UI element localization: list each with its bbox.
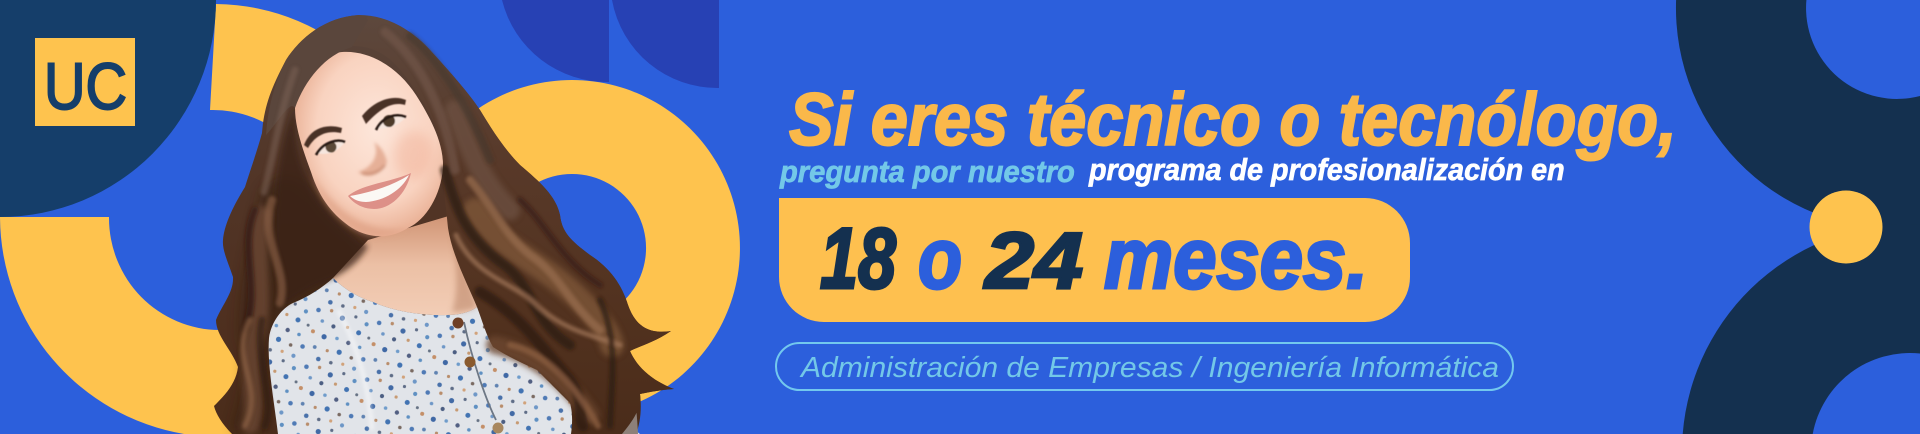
subheading (779, 153, 1565, 189)
logo UC: UC (44, 49, 127, 123)
subheading: programa de profesionalización en (1088, 153, 1565, 187)
hair left inner dark (275, 105, 368, 305)
nose (358, 142, 387, 176)
headline: Si eres técnico o tecnólogo, (789, 78, 1677, 161)
neck shadow (452, 225, 477, 312)
brows (304, 98, 406, 148)
hair back (214, 15, 674, 434)
hair shading left (232, 176, 363, 430)
mouth (348, 173, 411, 209)
duration pill: 18 (820, 212, 897, 307)
right lower blue circle (1813, 353, 1920, 434)
soft hair light bands (250, 110, 612, 425)
woman photo illustration (214, 15, 674, 434)
duration pill (779, 198, 1410, 322)
right upper blue circle (1806, 0, 1920, 99)
eyes (316, 115, 406, 155)
duration pill: meses. (1104, 211, 1368, 307)
yellow rings (0, 4, 740, 434)
programs pill (776, 343, 1513, 390)
face (295, 52, 443, 236)
cheek blush (394, 131, 434, 179)
buttons (452, 318, 464, 328)
dark circle top left (0, 0, 216, 217)
hair highlights (243, 32, 620, 426)
hair front right (352, 16, 674, 434)
jaw shadow (311, 172, 408, 236)
blouse (269, 278, 640, 434)
top dark blue quarter shapes (502, 0, 719, 88)
yellow dot (1810, 190, 1882, 264)
placket (464, 322, 496, 420)
duration pill: o (918, 210, 962, 306)
duration pill: 24 (983, 216, 1083, 305)
neck (333, 215, 477, 315)
hair top left part (266, 15, 368, 135)
right dark shapes (1676, 0, 1920, 434)
subheading: pregunta por nuestro (779, 155, 1075, 189)
programs pill: Administración de Empresas / Ingeniería Informática (799, 352, 1499, 384)
